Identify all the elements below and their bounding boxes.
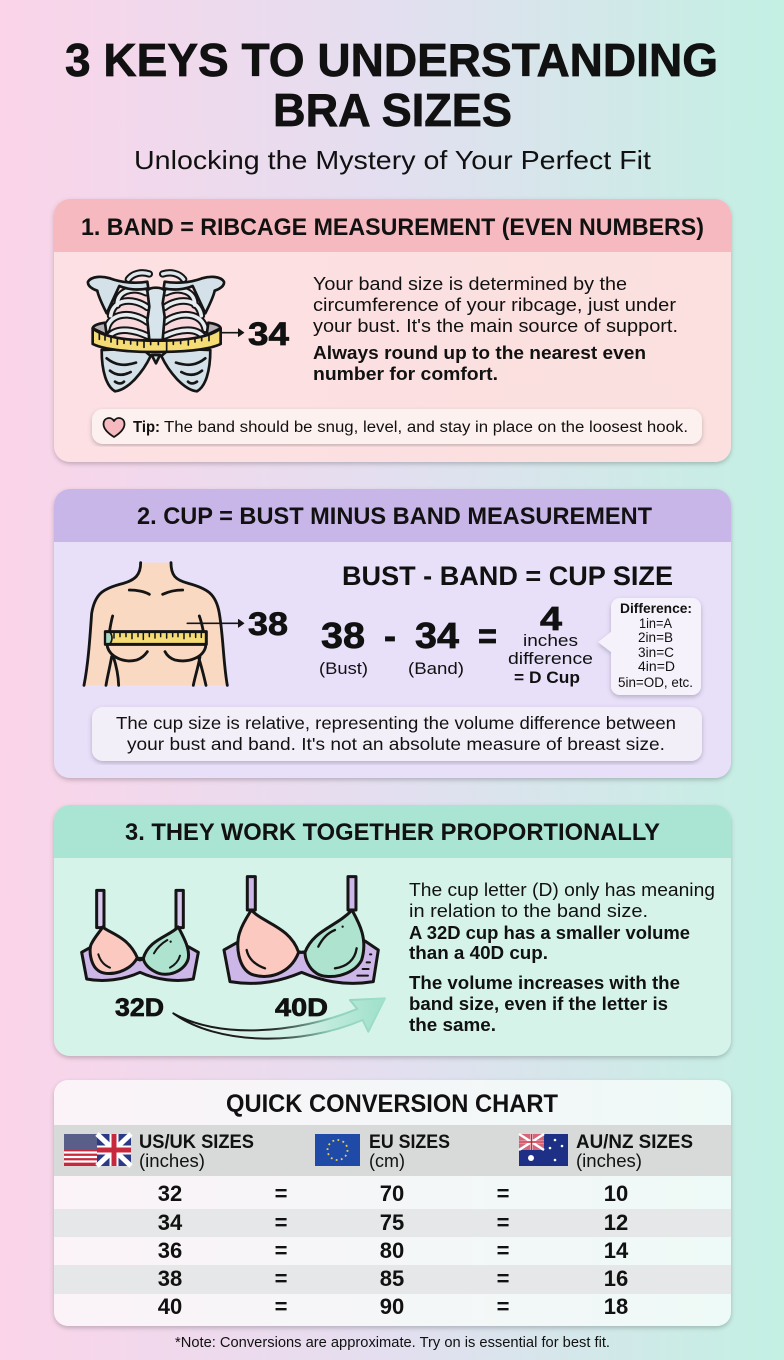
panel 3 text: The cup letter (D) only has meaning	[409, 880, 715, 900]
table rows: =	[275, 1181, 287, 1206]
table rows: 36	[158, 1238, 182, 1263]
US/UK column head	[139, 1132, 254, 1171]
table header	[54, 1125, 731, 1176]
table rows: 34	[158, 1210, 183, 1235]
table rows: =	[497, 1210, 509, 1235]
panel 1 header	[54, 199, 731, 252]
note callout: your bust and band. It's not an absolute measure of breast size.	[127, 734, 665, 754]
callout number 34: 34	[248, 316, 289, 352]
table rows: 80	[380, 1238, 404, 1263]
table rows: 75	[380, 1210, 404, 1235]
chart title: QUICK CONVERSION CHART	[226, 1090, 558, 1118]
formula: difference	[508, 649, 593, 668]
icon: large bra 40D	[224, 877, 378, 983]
icon: ribcage with tape	[88, 273, 244, 391]
AU/NZ column head: (inches)	[576, 1151, 642, 1171]
EU column head: EU SIZES	[369, 1132, 450, 1153]
panel 1 text: Your band size is determined by the	[313, 274, 627, 294]
icon: heart	[104, 418, 124, 437]
table rows: 38	[158, 1266, 182, 1291]
panel: proportional	[54, 805, 731, 1056]
table rows: =	[497, 1294, 509, 1319]
icon: EU flag	[315, 1134, 360, 1166]
formula: = D Cup	[514, 668, 580, 687]
subtitle: Unlocking the Mystery of Your Perfect Fit	[134, 145, 652, 175]
panel 3 text: The volume increases with the	[409, 973, 680, 993]
panel 2 heading: 2. CUP = BUST MINUS BAND MEASUREMENT	[137, 503, 652, 530]
formula: 38	[321, 615, 365, 656]
formula	[319, 600, 593, 687]
icon: AU flag	[519, 1134, 568, 1166]
panel: cup	[54, 489, 731, 778]
panel: band	[54, 199, 731, 462]
panel 1 text	[313, 274, 678, 384]
panel 3 text: than a 40D cup.	[409, 943, 548, 963]
EU column head: (cm)	[369, 1151, 405, 1171]
table rows: =	[275, 1294, 287, 1319]
callout number 38: 38	[248, 606, 288, 642]
table rows: =	[497, 1238, 509, 1263]
tip callout	[92, 409, 702, 444]
formula: inches	[523, 631, 578, 650]
callout: difference key	[598, 598, 701, 695]
table rows: =	[275, 1266, 287, 1291]
table rows: =	[275, 1238, 287, 1263]
title	[65, 34, 718, 136]
panel 1 heading: 1. BAND = RIBCAGE MEASUREMENT (EVEN NUMBERS)	[81, 214, 704, 241]
callout: difference key: 3in=C	[638, 645, 674, 660]
callout: difference key: 4in=D	[638, 659, 675, 674]
panel 1 text: number for comfort.	[313, 364, 498, 384]
panel: conversion chart	[54, 1080, 731, 1326]
icon: small bra 32D	[82, 890, 198, 980]
callout: difference key: 5in=OD, etc.	[618, 675, 693, 690]
panel 3 heading: 3. THEY WORK TOGETHER PROPORTIONALLY	[125, 819, 660, 846]
AU/NZ column head	[576, 1132, 693, 1171]
panel 1 text: Always round up to the nearest even	[313, 343, 646, 363]
EU column head	[369, 1132, 450, 1171]
table rows: 85	[380, 1266, 404, 1291]
label 32D: 32D	[115, 994, 164, 1022]
footnote: *Note: Conversions are approximate. Try on is essential for best fit.	[175, 1335, 610, 1351]
table rows: =	[497, 1266, 509, 1291]
panel 1 text: your bust. It's the main source of support.	[313, 316, 678, 336]
title: BRA SIZES	[273, 84, 512, 136]
panel 3 header	[54, 805, 731, 858]
table rows: 16	[604, 1266, 628, 1291]
table rows: 40	[158, 1294, 182, 1319]
table rows: 32	[158, 1181, 182, 1206]
table rows: =	[275, 1210, 287, 1235]
panel 3 text: in relation to the band size.	[409, 901, 648, 921]
callout: difference key: 2in=B	[638, 630, 673, 645]
tip text: The band should be snug, level, and stay in place on the loosest hook.	[164, 419, 688, 436]
arrow: 32D to 40D	[173, 998, 385, 1039]
table rows: =	[497, 1181, 509, 1206]
table rows: 10	[604, 1181, 628, 1206]
panel 2 header	[54, 489, 731, 542]
icon: US/UK flag	[64, 1134, 131, 1166]
note callout: The cup size is relative, representing the volume difference between	[116, 713, 676, 733]
note callout	[92, 707, 702, 761]
tip text: Tip:	[133, 419, 160, 436]
formula: (Bust)	[319, 659, 368, 678]
panel 3 text: the same.	[409, 1015, 496, 1035]
table rows: 14	[604, 1238, 629, 1263]
table rows: 70	[380, 1181, 404, 1206]
panel 1 text: circumference of your ribcage, just under	[313, 295, 676, 315]
formula: 34	[415, 615, 459, 656]
panel 3 text: band size, even if the letter is	[409, 994, 668, 1014]
table rows: 90	[380, 1294, 404, 1319]
callout: difference key: Difference:	[620, 601, 692, 616]
table rows	[54, 1181, 731, 1319]
formula: =	[478, 615, 497, 656]
formula: (Band)	[408, 659, 464, 678]
table rows: 12	[604, 1210, 628, 1235]
US/UK column head: (inches)	[139, 1151, 205, 1171]
AU/NZ column head: AU/NZ SIZES	[576, 1132, 693, 1153]
panel 3 text: A 32D cup has a smaller volume	[409, 923, 690, 943]
panel 3 text	[409, 880, 715, 1035]
formula: 4	[540, 600, 563, 637]
formula heading: BUST - BAND = CUP SIZE	[342, 561, 673, 591]
table rows: 18	[604, 1294, 628, 1319]
label 40D: 40D	[275, 994, 328, 1022]
icons: two bras	[82, 877, 385, 1039]
callout: difference key: 1in=A	[639, 616, 672, 631]
US/UK column head: US/UK SIZES	[139, 1132, 254, 1153]
icon: torso with tape	[84, 563, 244, 685]
title: 3 KEYS TO UNDERSTANDING	[65, 34, 718, 86]
formula: -	[384, 615, 396, 656]
